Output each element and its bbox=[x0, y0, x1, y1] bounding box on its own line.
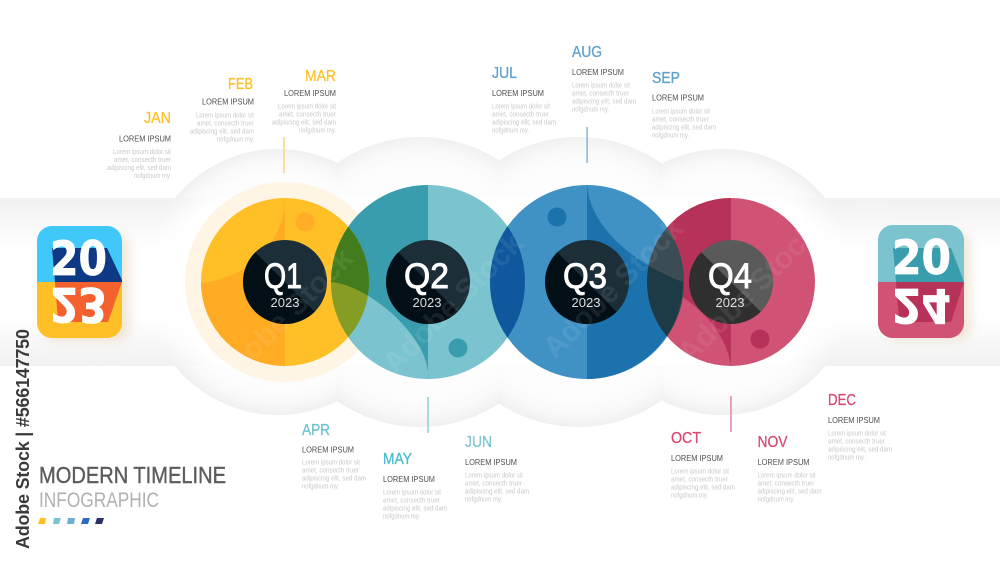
text block: NOV: amet, consecth truer bbox=[758, 480, 815, 488]
Q4 label: Q4 bbox=[708, 257, 752, 296]
text block: JUN: Lorem ipsum dolor sit bbox=[465, 472, 523, 480]
Q2 circle bbox=[331, 185, 525, 379]
text block: JAN: JAN bbox=[144, 110, 171, 127]
text block: SEP: LOREM IPSUM bbox=[652, 92, 704, 102]
text block: JUL: amet, consecth truer bbox=[492, 112, 550, 118]
text block: SEP: Lorem ipsum dolor sit bbox=[652, 108, 710, 116]
text block: APR: Lorem ipsum dolor sit bbox=[302, 460, 360, 466]
text block: JUL: adipiscing elit, sed dam bbox=[492, 120, 556, 126]
connector: MAR bbox=[283, 137, 285, 173]
badge: 2023: 20 bbox=[50, 232, 107, 287]
Q4 circle bbox=[647, 198, 815, 366]
text block: FEB: amet, consecth truer bbox=[197, 120, 255, 128]
text block: JUN: JUN bbox=[465, 434, 492, 451]
text block: JAN: LOREM IPSUM bbox=[119, 134, 171, 144]
text block: AUG: Lorem ipsum dolor sit bbox=[572, 82, 630, 90]
text block: JUL: LOREM IPSUM bbox=[492, 88, 544, 98]
badge: 2024 bbox=[878, 225, 971, 341]
text block: MAY: nofgdnum my. bbox=[383, 514, 420, 520]
Q2 label: Q2 bbox=[404, 257, 449, 296]
text block: MAR: adipiscing elit, sed dam bbox=[272, 120, 336, 126]
stock watermarks: Adobe Stock bbox=[207, 242, 360, 395]
text block: SEP bbox=[652, 70, 716, 140]
text block: SEP: nofgdnum my. bbox=[652, 132, 689, 140]
text block: SEP: adipiscing elit, sed dam bbox=[652, 124, 716, 132]
text block: NOV: LOREM IPSUM bbox=[758, 457, 810, 467]
text block: NOV: NOV bbox=[758, 434, 788, 451]
stock watermarks: Adobe Stock bbox=[537, 17, 690, 170]
Q3 label: Q3 bbox=[563, 257, 607, 296]
stock watermarks: Adobe Stock bbox=[507, 412, 660, 565]
stock watermarks: Adobe Stock bbox=[37, 32, 190, 185]
text block: DEC: amet, consecth truer bbox=[828, 438, 886, 446]
title colour markers bbox=[38, 518, 104, 524]
text block: JUN: nofgdnum my. bbox=[465, 496, 502, 504]
text block: MAY: MAY bbox=[383, 451, 412, 468]
stock watermarks: Adobe Stock bbox=[537, 212, 690, 365]
badge: 2023 bbox=[37, 226, 130, 342]
Q4 label: 2023 bbox=[716, 295, 744, 310]
text block: APR: LOREM IPSUM bbox=[302, 444, 354, 454]
text block: JUN: amet, consecth truer bbox=[465, 480, 523, 488]
stock id vertical text: Adobe Stock | #566147750 bbox=[13, 329, 33, 549]
stock watermarks: Adobe Stock bbox=[832, 92, 985, 245]
text block: MAY bbox=[383, 451, 447, 520]
text block: MAY: amet, consecth truer bbox=[383, 498, 441, 504]
text block: APR: adipiscing elit, sed dam bbox=[302, 476, 366, 482]
text block: JAN: nofgdnum my. bbox=[134, 173, 171, 180]
badge: 2023: 23 bbox=[50, 276, 107, 331]
background circular bumps bbox=[145, 137, 855, 427]
text block: JUL: JUL bbox=[492, 65, 517, 82]
title bbox=[39, 462, 226, 512]
text block: DEC bbox=[828, 392, 892, 462]
text block: AUG: adipiscing elit, sed dam bbox=[572, 98, 636, 106]
text block: DEC: nofgdnum my. bbox=[828, 454, 865, 462]
text block: MAY: Lorem ipsum dolor sit bbox=[383, 490, 441, 496]
text block: OCT: adipiscing elit, sed dam bbox=[671, 484, 735, 492]
text block: APR: nofgdnum my. bbox=[302, 484, 339, 490]
text block: AUG: nofgdnum my. bbox=[572, 106, 609, 114]
text block: FEB: Lorem ipsum dolor sit bbox=[196, 112, 254, 120]
text block: MAR bbox=[272, 68, 337, 134]
text block: JUN: LOREM IPSUM bbox=[465, 457, 517, 467]
Q1 label: Q1 bbox=[264, 257, 302, 296]
text block: FEB: nofgdnum my. bbox=[217, 136, 254, 144]
text block: NOV: nofgdnum my. bbox=[758, 496, 795, 504]
Q1 circle bbox=[201, 198, 369, 366]
text block: OCT: amet, consecth truer bbox=[671, 476, 729, 484]
text block: MAR: nofgdnum my. bbox=[299, 128, 336, 134]
Q4 label bbox=[689, 240, 773, 324]
text block: MAR: amet, consecth truer bbox=[279, 112, 337, 118]
text block: DEC: Lorem ipsum dolor sit bbox=[828, 430, 886, 438]
text block: AUG bbox=[572, 44, 636, 114]
stock watermarks: Adobe Stock bbox=[677, 407, 830, 560]
text block: JAN: adipiscing elit, sed dam bbox=[107, 165, 171, 172]
stock watermarks: Adobe Stock bbox=[697, 22, 850, 175]
Q3 circle bbox=[490, 185, 684, 379]
background band bbox=[0, 198, 1000, 366]
text block: JUL: Lorem ipsum dolor sit bbox=[492, 104, 550, 110]
Q1 halo bbox=[185, 182, 385, 382]
text block: OCT: OCT bbox=[671, 430, 701, 447]
text block: APR: APR bbox=[302, 422, 330, 439]
Q1 label: 2023 bbox=[271, 295, 299, 310]
text block: APR: amet, consecth truer bbox=[302, 468, 360, 474]
overlap Q2 and Q3 bbox=[490, 226, 525, 338]
text block: MAR: LOREM IPSUM bbox=[284, 88, 336, 98]
Q3 label bbox=[545, 240, 629, 324]
connector: MAY bbox=[427, 397, 429, 433]
title: INFOGRAPHIC bbox=[39, 489, 159, 512]
connector: OCT bbox=[730, 396, 732, 432]
text block: DEC: LOREM IPSUM bbox=[828, 415, 880, 425]
stock watermarks: Adobe Stock bbox=[672, 217, 825, 370]
text block: NOV: adipiscing elit, sed dam bbox=[758, 488, 822, 496]
overlap Q1 and Q2 bbox=[331, 226, 369, 338]
stock watermarks: Adobe Stock bbox=[842, 397, 995, 550]
Q2 label: 2023 bbox=[413, 295, 441, 310]
text block: OCT: nofgdnum my. bbox=[671, 492, 708, 500]
text block: MAY: adipiscing elit, sed dam bbox=[383, 506, 447, 512]
text block: JUN: adipiscing elit, sed dam bbox=[465, 488, 529, 496]
badge: 2024: 20 bbox=[892, 231, 951, 286]
text block: FEB bbox=[190, 76, 255, 144]
text block: JAN bbox=[107, 110, 172, 180]
text block: AUG: amet, consecth truer bbox=[572, 90, 630, 98]
connector: AUG bbox=[586, 127, 588, 163]
text block: OCT: Lorem ipsum dolor sit bbox=[671, 468, 729, 476]
text block: JUL bbox=[492, 65, 556, 134]
stock watermarks: Adobe Stock bbox=[197, 27, 350, 180]
stock watermarks: Adobe Stock bbox=[342, 407, 495, 560]
text block: JAN: Lorem ipsum dolor sit bbox=[113, 149, 171, 156]
text block: MAY: LOREM IPSUM bbox=[383, 474, 435, 484]
text block: JUN bbox=[465, 434, 529, 504]
text block: NOV: Lorem ipsum dolor sit bbox=[758, 472, 816, 480]
text block: MAR: MAR bbox=[305, 68, 336, 85]
text block: FEB: adipiscing elit, sed dam bbox=[190, 128, 254, 136]
text block: OCT: LOREM IPSUM bbox=[671, 453, 723, 463]
title: MODERN TIMELINE bbox=[39, 462, 226, 488]
overlap Q3 and Q4 bbox=[647, 227, 684, 337]
text block: DEC: adipiscing elit, sed dam bbox=[828, 446, 892, 454]
stock watermarks: Adobe Stock bbox=[367, 32, 520, 185]
Q1 label bbox=[243, 240, 327, 324]
text block: APR bbox=[302, 422, 366, 490]
text block: AUG: LOREM IPSUM bbox=[572, 67, 624, 77]
text block: SEP: SEP bbox=[652, 70, 680, 87]
text block: SEP: amet, consecth truer bbox=[652, 116, 710, 124]
text block: FEB: FEB bbox=[228, 76, 253, 93]
text block: OCT bbox=[671, 430, 735, 500]
text block: JUL: nofgdnum my. bbox=[492, 128, 529, 134]
Q2 label bbox=[386, 240, 470, 324]
text block: FEB: LOREM IPSUM bbox=[202, 96, 254, 106]
badge: 2024: 24 bbox=[892, 277, 951, 332]
stock watermarks: Adobe Stock bbox=[52, 262, 205, 415]
text block: MAR: Lorem ipsum dolor sit bbox=[278, 104, 336, 110]
text block: JAN: amet, consecth truer bbox=[114, 157, 172, 164]
stock watermarks: Adobe Stock bbox=[377, 227, 530, 380]
text block: NOV bbox=[758, 434, 822, 504]
Q3 label: 2023 bbox=[572, 295, 600, 310]
text block: DEC: DEC bbox=[828, 392, 856, 409]
text block: AUG: AUG bbox=[572, 44, 602, 61]
